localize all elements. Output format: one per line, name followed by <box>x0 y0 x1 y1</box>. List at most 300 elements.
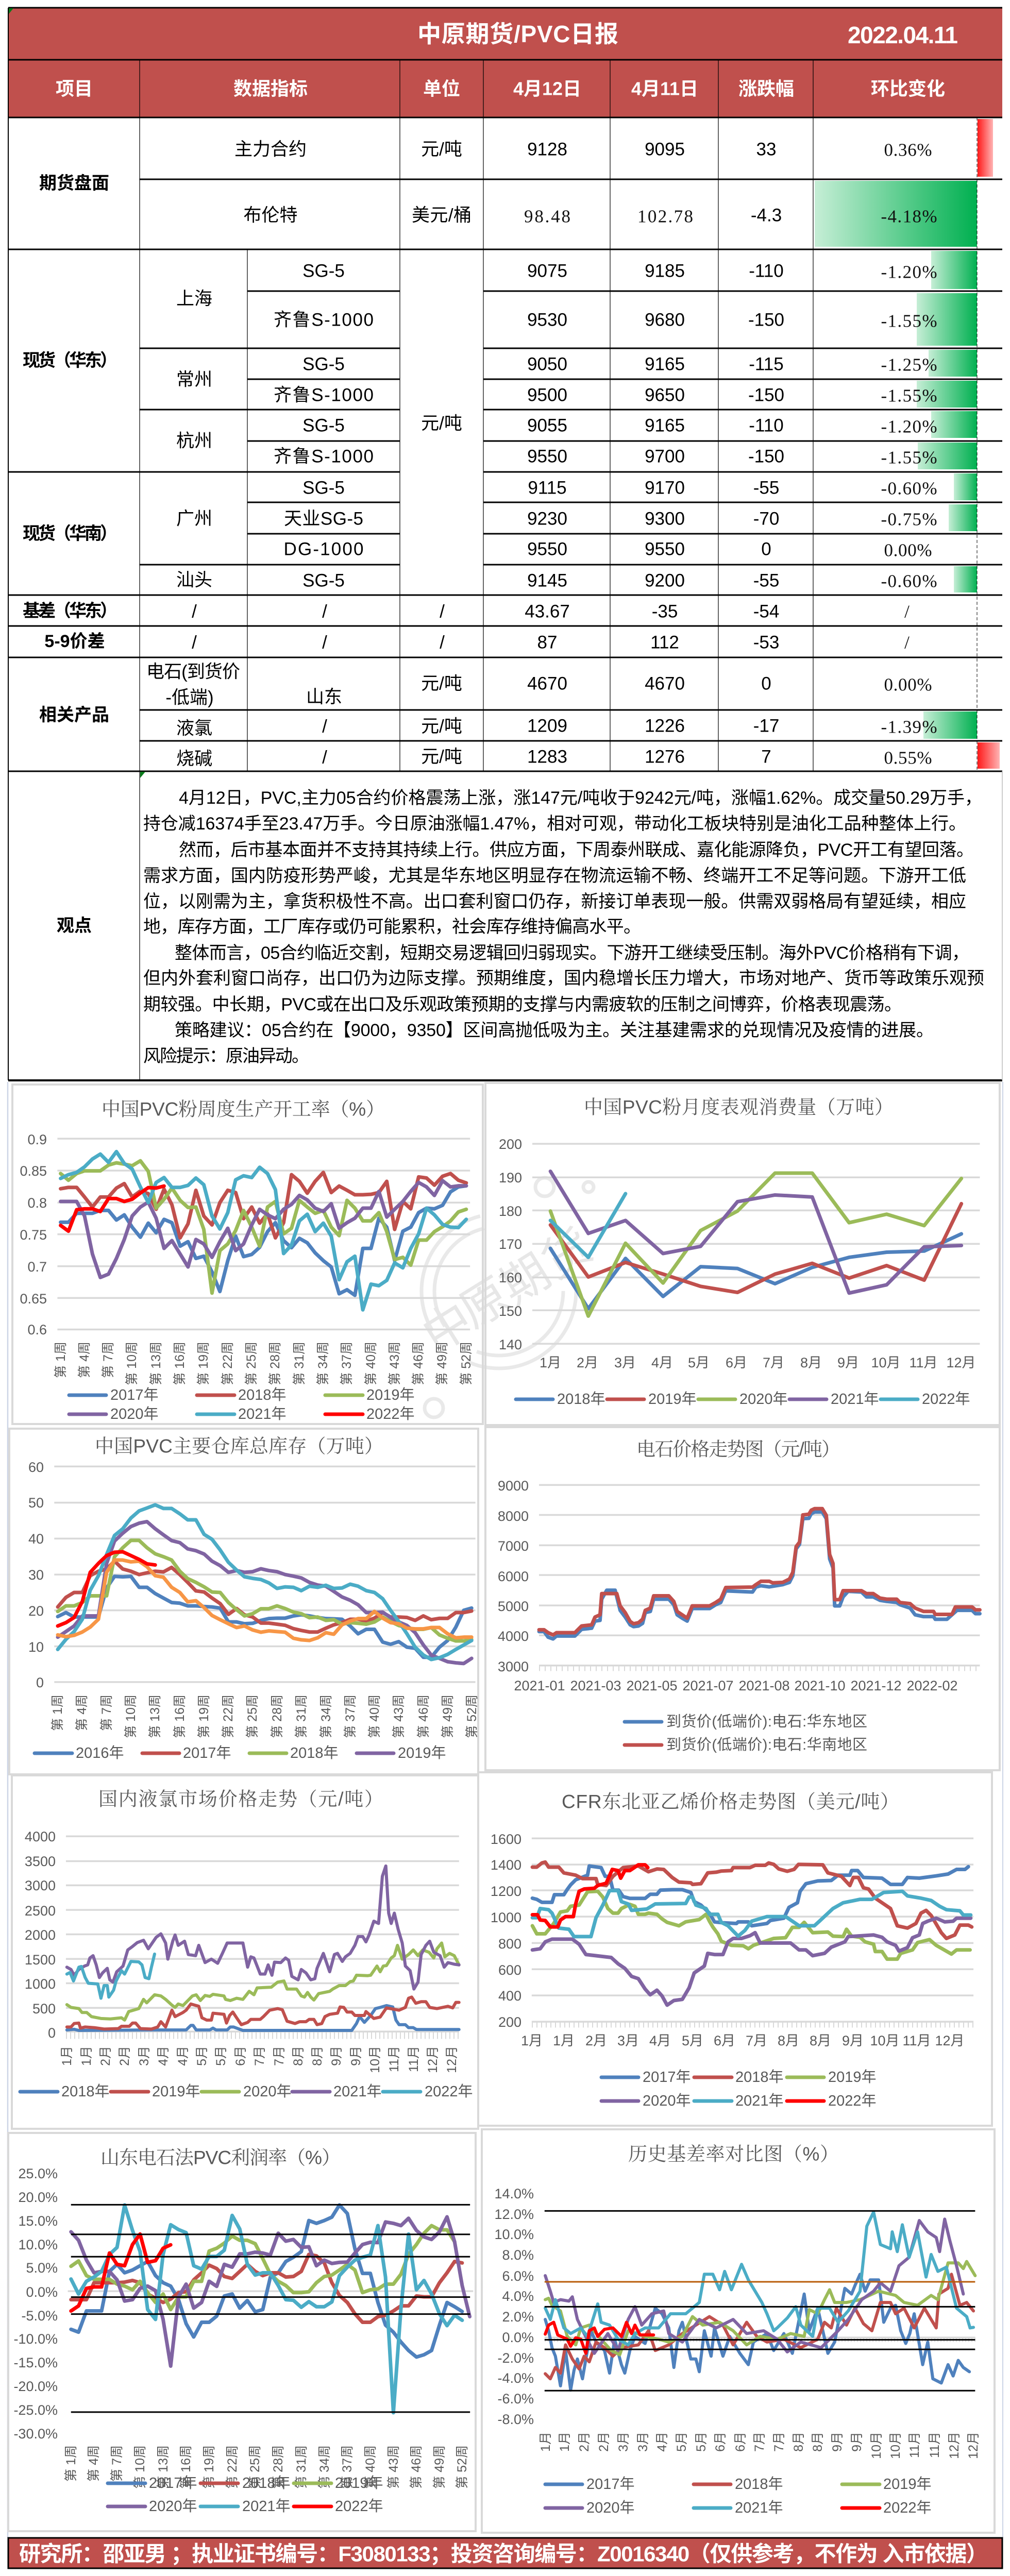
x axis labels: 5月 <box>214 2046 228 2066</box>
x axis labels: 11月 <box>407 2046 421 2072</box>
x axis labels: 5月 <box>694 2432 709 2452</box>
rows: 华东现货: 9185 <box>645 261 685 281</box>
x axis labels: 第 43周 <box>386 2445 401 2489</box>
table column headers: 数据指标 <box>233 78 308 99</box>
y axis labels: 200 <box>499 1137 522 1152</box>
legend: 2020年 <box>739 1391 788 1408</box>
x axis labels: 8月 <box>310 2046 325 2066</box>
x axis labels: 第 31周 <box>294 2445 309 2489</box>
x axis labels: 第 19周 <box>196 1342 211 1385</box>
y axis labels: -15.0% <box>13 2355 58 2370</box>
row labels: first column categories: 5-9价差 <box>44 632 105 651</box>
rows: 华南现货: 9145 <box>527 571 567 590</box>
x axis labels: 12月 <box>947 2432 962 2459</box>
rows: 华南现货: -70 <box>753 509 779 529</box>
y axis labels: 140 <box>499 1337 522 1352</box>
y axis labels: -4.0% <box>497 2370 534 2386</box>
row: 基差（华东）: -54 <box>753 602 779 621</box>
y axis labels: 50 <box>28 1495 44 1511</box>
rows: 华东现货: 9165 <box>645 415 685 436</box>
row: 布伦特: -4.3 <box>751 205 782 226</box>
row labels: first column categories: 期货盘面 <box>39 174 109 193</box>
rows: 华东现货: 齐鲁S-1000 <box>274 385 374 405</box>
x axis labels: 第 22周 <box>221 1694 235 1738</box>
y axis labels: 1000 <box>25 1976 56 1992</box>
watermark: 中原期货 stamp: 货 <box>533 1219 601 1289</box>
x axis labels: 第 25周 <box>248 2445 262 2489</box>
x axis labels: 10月 <box>368 2046 382 2073</box>
watermark: 中原期货 stamp: 原 <box>451 1268 519 1338</box>
legend: 2016年 <box>76 1744 124 1761</box>
row: 5-9价差 <box>192 633 910 652</box>
rows: 相关产品: 0.55% <box>884 748 932 768</box>
row: 主力合约: 主力合约 <box>234 139 307 160</box>
y axis labels: 30 <box>28 1567 44 1583</box>
y axis labels: 1000 <box>491 1910 521 1925</box>
y axis labels: 8000 <box>498 1509 529 1524</box>
watermark: 中原期货 stamp: 期 <box>492 1245 560 1315</box>
rows: 华南现货: 0.00% <box>884 540 932 561</box>
report date: 2022.04.11 <box>848 22 958 48</box>
x axis labels: 7月 <box>772 2432 786 2452</box>
table column headers: 环比变化 <box>871 78 945 99</box>
legend <box>516 1391 970 1408</box>
x axis labels: 8月 <box>291 2046 306 2066</box>
rows: 华东现货: -110 <box>749 261 784 281</box>
rows: 华南现货: DG-1000 <box>283 539 364 560</box>
x axis labels: 第 37周 <box>343 1694 358 1738</box>
y axis labels: 0.9 <box>27 1132 47 1147</box>
x axis labels: 2月 <box>117 2046 132 2066</box>
row: 基差（华东）: / <box>322 602 327 621</box>
x axis labels: 第 19周 <box>202 2445 216 2489</box>
x axis labels: 4月 <box>651 1355 673 1370</box>
row: 基差（华东） <box>192 602 910 621</box>
y axis labels: 10 <box>28 1639 44 1655</box>
y axis labels: 40 <box>28 1531 44 1547</box>
x axis labels: 2021-07 <box>682 1678 734 1693</box>
y axis labels: 6.0% <box>502 2268 534 2284</box>
x axis labels: 6月 <box>733 2432 748 2452</box>
y axis labels: -2.0% <box>497 2350 534 2366</box>
x axis labels: 5月 <box>675 2432 689 2452</box>
x axis labels: 3月 <box>617 2033 639 2048</box>
text block: market view: 然而，后市基本面并不支持其持续上行。供应方面，下周泰州联成、嘉化能源降负，PVC开工有望回落。 <box>179 840 974 860</box>
x axis labels: 2021-03 <box>570 1678 621 1693</box>
chart title: 国内液氯市场价格走势（元/吨） <box>98 1789 383 1809</box>
y axis labels <box>13 2166 58 2442</box>
legend <box>20 2083 473 2100</box>
x axis labels: 10月 <box>871 1355 901 1370</box>
y axis labels: 800 <box>498 1936 521 1952</box>
x axis labels: 8月 <box>778 2033 799 2048</box>
x axis labels: 1月 <box>553 2033 575 2048</box>
y axis labels: 500 <box>32 2001 56 2016</box>
row: 基差（华东）: 43.67 <box>525 602 570 621</box>
row: 主力合约: 9095 <box>645 139 685 160</box>
rows: 相关产品: 液氯 <box>176 718 212 739</box>
line plot <box>57 1139 470 1330</box>
y axis labels: 160 <box>499 1270 522 1285</box>
rows: 相关产品: 元/吨 <box>421 716 462 737</box>
rows: 相关产品: 电石(到货价 <box>146 662 240 682</box>
x axis labels: 10月 <box>869 2432 884 2459</box>
chart title: 中国PVC粉周度生产开工率（%） <box>102 1098 385 1120</box>
y axis labels: 0.65 <box>20 1291 47 1307</box>
x axis labels: 6月 <box>713 2432 728 2452</box>
legend: 2020年 <box>586 2499 635 2516</box>
legend <box>108 2475 383 2515</box>
rows: 华南现货: 9300 <box>645 509 685 529</box>
text block: market view: 整体而言，05合约临近交割，短期交易逻辑回归弱现实。下游开工继续受压制。海外PVC价格稍有下调， <box>175 943 969 963</box>
footer band: analyst credentials and disclaimer: 研究所：邵亚男 ；执业证书编号：F3080133；投资咨询编号：Z0016340（仅供参考，不作为 入市依据） <box>19 2542 988 2566</box>
chart panel: 中国PVC粉周度生产开工率 <box>12 1084 483 1424</box>
legend: 2018年 <box>735 2476 783 2493</box>
x axis labels: 9月 <box>329 2046 344 2066</box>
legend <box>625 1713 867 1753</box>
table column headers: 单位 <box>423 78 460 99</box>
x axis labels: 第 13周 <box>156 2445 171 2489</box>
rows: 相关产品: / <box>322 747 327 768</box>
x axis labels: 第 7周 <box>101 1342 115 1378</box>
chart title: 历史基差率对比图（%） <box>628 2143 839 2165</box>
chart title: 山东电石法PVC利润率（%） <box>100 2147 341 2168</box>
y axis labels: 10.0% <box>494 2227 534 2242</box>
y axis labels: -10.0% <box>13 2331 58 2347</box>
y axis labels: -5.0% <box>21 2308 58 2324</box>
rows: 华南现货: 9230 <box>527 509 567 529</box>
y axis labels: 1400 <box>491 1857 521 1873</box>
rows: 华东现货: 9165 <box>645 354 685 374</box>
rows: 华南现货: 9200 <box>645 571 685 590</box>
y axis labels: -6.0% <box>497 2391 534 2406</box>
y axis labels: 1600 <box>491 1832 521 1847</box>
x axis labels: 第 7周 <box>110 2445 124 2482</box>
header band: report title and date <box>8 8 1002 117</box>
x axis labels: 2月 <box>98 2046 113 2066</box>
line plot <box>532 1838 973 2022</box>
rows: 华东现货: 齐鲁S-1000 <box>274 310 374 330</box>
text block: market view: 但内外套利窗口尚存，出口仍为边际支撑。预期维度，国内稳增长压力增大，市场对地产、货币等政策乐观预 <box>143 969 984 988</box>
x axis labels: 2021-08 <box>738 1678 790 1693</box>
x axis labels: 9月 <box>842 2033 864 2048</box>
row labels: first column categories <box>23 174 117 936</box>
row: 5-9价差: 112 <box>650 633 679 652</box>
x axis labels: 第 19周 <box>197 1694 211 1738</box>
y axis labels: 9000 <box>498 1478 529 1494</box>
x axis labels: 第 7周 <box>99 1694 114 1731</box>
rows: 华东现货: 9650 <box>645 385 685 405</box>
x axis labels: 12月 <box>445 2046 459 2073</box>
chart panel: 中国PVC主要仓库总库存 <box>9 1429 479 1774</box>
rows: 华东现货: -1.20% <box>881 416 937 437</box>
y axis labels: 0.6 <box>27 1322 47 1337</box>
x axis labels: 3月 <box>636 2432 650 2452</box>
x axis labels: 12月 <box>966 2432 981 2459</box>
legend: 2020年 <box>149 2498 197 2515</box>
row: 5-9价差: 87 <box>537 633 557 652</box>
x axis labels: 第 4周 <box>77 1342 92 1378</box>
rows: 华南现货: 广州 <box>176 509 212 529</box>
rows: 相关产品: -1.39% <box>881 717 937 737</box>
text block: market view: 策略建议：05合约在【9000，9350】区间高抛低吸为主。关注基建需求的兑现情况及疫情的进展。 <box>175 1021 934 1040</box>
x axis labels: 第 43周 <box>388 1342 402 1385</box>
y axis labels: 6000 <box>498 1569 529 1584</box>
line plot <box>545 2211 975 2391</box>
table column headers: 项目 <box>56 78 93 99</box>
rows: 华东现货: 9530 <box>527 310 567 330</box>
y axis labels <box>28 1460 44 1690</box>
rows: 华东现货: 9500 <box>527 385 567 405</box>
rows: 华东现货: 9680 <box>645 310 685 330</box>
rows: 华东现货: -1.20% <box>881 262 937 282</box>
x axis labels: 第 31周 <box>294 1694 309 1738</box>
y axis labels: 0.8 <box>27 1195 47 1211</box>
line plot <box>532 1144 980 1344</box>
x axis labels: 第 40周 <box>364 1342 378 1385</box>
legend: 2021年 <box>735 2092 784 2109</box>
legend: 2020年 <box>643 2092 691 2109</box>
x axis labels: 4月 <box>649 2033 671 2048</box>
x axis labels: 第 49周 <box>435 1342 449 1385</box>
x axis labels: 3月 <box>616 2432 631 2452</box>
x axis labels: 11月 <box>387 2046 401 2072</box>
watermark: 中原期货 stamp <box>414 1178 601 1417</box>
rows: 相关产品: -17 <box>753 716 779 736</box>
rows: 华东现货: -115 <box>749 354 784 374</box>
y axis labels: 150 <box>499 1303 522 1319</box>
legend: 2018年 <box>290 1744 339 1761</box>
legend: 2018年 <box>735 2069 784 2086</box>
legend <box>69 1386 415 1422</box>
rows: 华东现货: -150 <box>748 446 784 467</box>
y axis labels: 400 <box>498 1988 521 2004</box>
legend: 2019年 <box>883 2476 932 2493</box>
rows: 华东现货: -150 <box>748 385 784 405</box>
x axis labels: 4月 <box>176 2046 190 2066</box>
y axis labels: 15.0% <box>18 2213 58 2229</box>
x axis labels: 第 13周 <box>148 1694 162 1738</box>
x axis labels: 6月 <box>714 2033 735 2048</box>
rows: 华南现货: 9550 <box>645 539 685 560</box>
y axis labels <box>20 1132 47 1337</box>
legend: 2021年 <box>333 2083 382 2100</box>
x axis labels: 12月 <box>935 2033 965 2048</box>
x axis labels: 第 34周 <box>317 2445 332 2489</box>
x axis labels <box>64 2445 469 2489</box>
x axis labels: 第 49周 <box>441 1694 455 1738</box>
legend <box>35 1744 446 1761</box>
x axis labels: 12月 <box>946 1355 976 1370</box>
y axis labels: 190 <box>499 1170 522 1185</box>
table column headers: 4月12日 <box>513 78 581 99</box>
rows: 相关产品: 1283 <box>527 747 567 767</box>
x axis labels: 6月 <box>726 1355 747 1370</box>
rows: 华南现货: SG-5 <box>302 571 345 590</box>
x axis labels: 第 37周 <box>340 1342 354 1385</box>
chart title: 中国PVC主要仓库总库存（万吨） <box>95 1435 383 1457</box>
x axis labels: 第 40周 <box>363 2445 378 2489</box>
x axis labels: 9月 <box>850 2432 864 2452</box>
y axis labels: -8.0% <box>497 2412 534 2427</box>
legend: 2021年 <box>831 1391 879 1408</box>
legend: 2019年 <box>152 2083 200 2100</box>
x axis labels: 10月 <box>870 2033 900 2048</box>
x axis labels: 第 43周 <box>392 1694 406 1738</box>
row labels: first column categories: 相关产品 <box>39 705 109 725</box>
rows: 华东现货: -1.55% <box>881 447 937 468</box>
line plot <box>66 1836 459 2031</box>
rows: 华南现货: 9170 <box>645 478 685 498</box>
chart panel: 中国PVC粉月度表观消费量 <box>485 1083 1000 1425</box>
row: 主力合约: 0.36% <box>884 140 932 160</box>
chart title: 中国PVC粉月度表观消费量（万吨） <box>584 1096 894 1118</box>
y axis labels <box>25 1829 56 2041</box>
chart panel: 山东电石法PVC利润率 <box>8 2133 476 2531</box>
x axis labels: 1月 <box>538 2432 553 2452</box>
legend <box>545 2476 932 2516</box>
title: 中原期货/PVC日报 <box>417 21 618 47</box>
data bars: month-on-month change <box>815 117 1000 771</box>
y axis labels: 0.75 <box>20 1227 47 1243</box>
y axis labels: -25.0% <box>13 2402 58 2418</box>
x axis labels: 2021-05 <box>626 1678 678 1693</box>
text block: market view: 位，以刚需为主，拿货积极性不高。出口套利窗口仍存，新接订单表现一般。供需双弱格局有望延续，相应 <box>143 892 966 911</box>
legend: 2018年 <box>61 2083 110 2100</box>
rows: 相关产品: / <box>322 716 327 737</box>
chart panel: 国内液氯市场价格走势 <box>12 1775 478 2129</box>
legend: 2017年 <box>110 1386 159 1403</box>
legend: 2022年 <box>922 1391 970 1408</box>
rows: 华东现货: -1.55% <box>881 385 937 406</box>
rows: 华东现货: -150 <box>748 310 784 330</box>
rows: 华东现货: 常州 <box>176 370 212 389</box>
x axis labels: 第 34周 <box>316 1342 330 1385</box>
y axis labels: 0 <box>36 1675 44 1690</box>
x axis labels: 4月 <box>156 2046 171 2066</box>
x axis labels: 7月 <box>252 2046 267 2066</box>
y axis labels: 170 <box>499 1236 522 1252</box>
rows: 相关产品: 0.00% <box>884 675 932 694</box>
x axis labels: 11月 <box>907 2432 922 2458</box>
rows: 华东现货: 9050 <box>527 354 567 374</box>
row: 主力合约 <box>234 139 932 160</box>
x axis labels: 8月 <box>800 1355 822 1370</box>
rows: 华东现货: 9700 <box>645 446 685 467</box>
rows: 华东现货: SG-5 <box>302 354 345 374</box>
rows: 华东现货: 元/吨 <box>421 413 462 434</box>
rows: 华东现货: 9075 <box>527 261 567 281</box>
x axis labels: 2月 <box>585 2033 607 2048</box>
y axis labels: 3000 <box>498 1659 529 1674</box>
rows: 华东现货: SG-5 <box>302 415 345 436</box>
row: 5-9价差: / <box>322 633 327 652</box>
x axis labels: 第 28周 <box>271 2445 285 2489</box>
rows: 华南现货: 汕头 <box>176 570 212 590</box>
x axis labels: 第 52周 <box>455 2445 469 2489</box>
rows: 华东现货: 齐鲁S-1000 <box>274 446 374 467</box>
x axis labels: 第 49周 <box>432 2445 447 2489</box>
x axis labels <box>60 2036 459 2073</box>
text block: market view: 地，库存方面，工厂库存或仍可能累积，社会库存维持偏高水平。 <box>143 917 641 937</box>
y axis labels: 14.0% <box>494 2186 534 2201</box>
x axis labels: 3月 <box>614 1355 636 1370</box>
x axis labels <box>514 1668 980 1693</box>
row: 布伦特: 美元/桶 <box>412 205 472 226</box>
rows: 相关产品: 4670 <box>645 674 685 693</box>
x axis labels: 10月 <box>888 2432 903 2459</box>
x axis labels: 第 1周 <box>54 1342 68 1378</box>
legend: 2017年 <box>586 2476 635 2493</box>
rows: 华东现货: SG-5 <box>302 261 345 281</box>
y axis labels: 1500 <box>25 1952 56 1968</box>
y axis labels: 4000 <box>498 1629 529 1644</box>
x axis labels: 2月 <box>577 2432 592 2452</box>
x axis labels: 11月 <box>928 2432 942 2458</box>
row: 5-9价差: -53 <box>753 633 779 652</box>
text block: market view: 需求方面，国内防疫形势严峻，尤其是华东地区明显存在物流运输不畅、终端开工不足等问题。下游开工低 <box>143 866 966 886</box>
row: 基差（华东）: -35 <box>652 602 678 621</box>
x axis labels: 第 10周 <box>124 1694 138 1738</box>
x axis labels: 2021-01 <box>514 1678 565 1693</box>
y axis labels: 20.0% <box>18 2190 58 2205</box>
x axis labels: 第 16周 <box>179 2445 193 2489</box>
y axis labels: 4.0% <box>502 2289 534 2304</box>
page side rules <box>8 1082 1003 2538</box>
chart panel: 电石价格走势图 <box>485 1427 1000 1770</box>
row: 布伦特: 布伦特 <box>243 205 298 226</box>
row: 基差（华东）: / <box>192 602 197 621</box>
y axis labels <box>494 2186 534 2427</box>
row: 主力合约: 33 <box>756 139 776 160</box>
row: 布伦特 <box>243 205 937 227</box>
x axis labels: 1月 <box>521 2033 543 2048</box>
rows: 华南现货: 9550 <box>527 539 567 560</box>
text block: market view: 4月12日，PVC,主力05合约价格震荡上涨，涨147元/吨收于9242元/吨，涨幅1.62%。成交量50.29万手， <box>179 788 982 808</box>
legend: 2022年 <box>335 2498 383 2515</box>
x axis labels: 11月 <box>902 2033 931 2048</box>
x axis labels: 第 46周 <box>411 1342 426 1385</box>
rows: 华东现货: -110 <box>749 415 784 436</box>
rows: 华南现货: 天业SG-5 <box>284 509 363 529</box>
row: 布伦特: 98.48 <box>524 206 570 227</box>
line plot <box>54 1466 476 1682</box>
x axis labels: 第 22周 <box>225 2445 240 2489</box>
x axis labels: 第 46周 <box>416 1694 431 1738</box>
x axis labels <box>521 2025 973 2048</box>
legend: 2019年 <box>398 1744 446 1761</box>
row: 主力合约: 元/吨 <box>421 139 462 160</box>
table column headers: 4月11日 <box>631 78 698 99</box>
rows: 华南现货: -55 <box>753 571 779 590</box>
x axis labels: 第 40周 <box>367 1694 382 1738</box>
row: 基差（华东）: / <box>440 602 445 621</box>
legend: 2020年 <box>243 2083 292 2100</box>
rows: 相关产品: 元/吨 <box>421 674 462 693</box>
y axis labels: 5000 <box>498 1599 529 1614</box>
x axis labels: 3月 <box>137 2046 152 2066</box>
rows: 华东现货: 9550 <box>527 446 567 467</box>
rows: 相关产品: 元/吨 <box>421 747 462 767</box>
legend: 到货价(低端价):电石:华东地区 <box>666 1713 867 1730</box>
x axis labels: 12月 <box>426 2046 440 2073</box>
row: 布伦特: 102.78 <box>637 206 693 227</box>
x axis labels: 第 10周 <box>133 2445 147 2489</box>
rows: 华南现货: 0 <box>761 539 771 560</box>
x axis labels <box>54 1342 474 1385</box>
table column headers <box>56 78 945 99</box>
table grid lines <box>8 8 1002 1080</box>
